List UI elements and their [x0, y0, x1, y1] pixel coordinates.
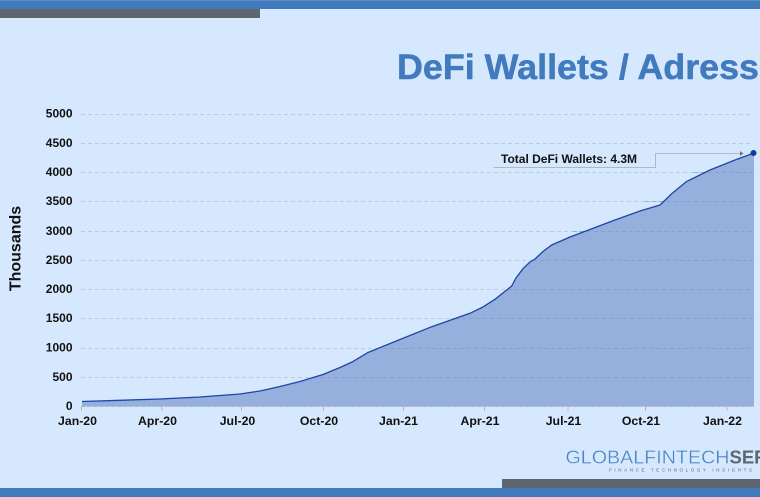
y axis labels: 0 [66, 399, 73, 413]
y axis labels: 500 [52, 370, 73, 384]
y axis title: Thousands [8, 206, 24, 291]
y axis labels [46, 106, 73, 413]
x axis labels: Jul-20 [220, 414, 255, 428]
x axis labels: Apr-21 [461, 414, 500, 428]
x axis labels: Oct-21 [622, 414, 660, 428]
y axis labels: 5000 [46, 106, 73, 120]
x axis labels: Jan-20 [58, 414, 97, 428]
callout: total DeFi wallets: Total DeFi Wallets: 4.3M [501, 152, 637, 166]
x axis labels [58, 414, 742, 428]
top blue bar [0, 0, 760, 9]
y axis labels: 1000 [46, 340, 73, 354]
y axis labels: 2000 [46, 282, 73, 296]
area chart: DeFi wallets [82, 153, 754, 406]
title: DeFi Wallets / Adress [397, 48, 759, 87]
x axis labels: Jul-21 [546, 414, 581, 428]
bottom blue bar [0, 488, 760, 497]
x axis labels: Jan-22 [703, 414, 742, 428]
y axis labels: 3000 [46, 224, 73, 238]
y axis labels: 4000 [46, 165, 73, 179]
top grey bar [0, 9, 260, 18]
logo: Global Fintech Series: FINANCE TECHNOLOGY INSIGHTS [609, 468, 752, 472]
y axis labels: 4500 [46, 136, 73, 150]
x axis line and ticks [81, 406, 754, 411]
logo: Global Fintech Series [566, 446, 760, 472]
logo: Global Fintech Series: GLOBALFINTECH [566, 446, 730, 468]
x axis labels: Apr-20 [138, 414, 177, 428]
y axis labels: 3500 [46, 194, 73, 208]
x axis labels: Jan-21 [379, 414, 418, 428]
y axis labels: 2500 [46, 253, 73, 267]
bottom grey bar [502, 479, 760, 488]
x axis labels: Oct-20 [300, 414, 338, 428]
y axis labels: 1500 [46, 311, 73, 325]
callout: total DeFi wallets [494, 150, 756, 168]
